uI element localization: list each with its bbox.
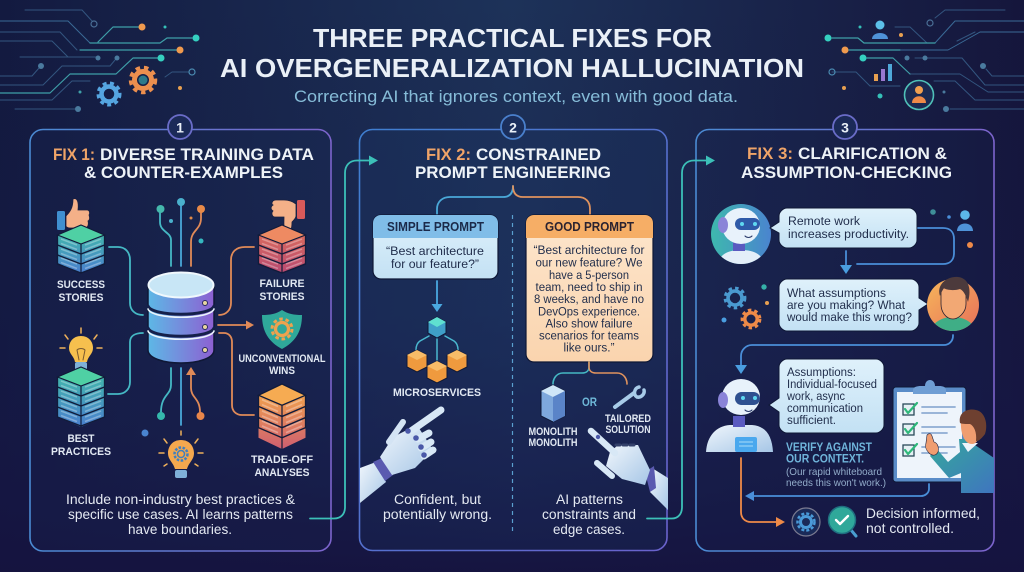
title: AI OVERGENERALIZATION HALLUCINATION bbox=[220, 53, 804, 83]
label: microservices: MICROSERVICES bbox=[393, 387, 481, 399]
text: simple prompt outcome bbox=[383, 492, 492, 522]
bubble: assumptions: Individual-focused bbox=[787, 377, 877, 391]
icon: unconventional wins shield bbox=[262, 310, 302, 349]
badge 1: 1 bbox=[176, 120, 184, 136]
icon: wrench bbox=[615, 387, 644, 407]
label: monolith: MONOLITH bbox=[528, 426, 578, 438]
text: fix 1 summary: have boundaries. bbox=[128, 522, 232, 537]
badge 1 bbox=[168, 115, 192, 139]
badge 3 bbox=[833, 115, 857, 139]
bubble: clarifying question bbox=[779, 279, 928, 331]
bubble: clarifying question: are you making? What bbox=[787, 298, 906, 312]
bubble: remote work claim bbox=[770, 208, 917, 248]
label: monolith bbox=[528, 426, 578, 449]
label: failure stories bbox=[260, 278, 304, 303]
title: THREE PRACTICAL FIXES FOR bbox=[313, 23, 712, 53]
label: tailored solution bbox=[605, 413, 651, 436]
heading: fix 2: FIX 2: bbox=[426, 145, 471, 164]
figure: person checking list bbox=[925, 410, 994, 493]
panel: fix 2 bbox=[360, 115, 668, 550]
bubble: assumptions: Assumptions: bbox=[787, 365, 856, 379]
heading: fix 3: FIX 3: bbox=[747, 144, 793, 163]
heading: fix 3: CLARIFICATION & bbox=[798, 144, 947, 163]
avatar: person bbox=[927, 277, 979, 331]
text: fix 1 summary: specific use cases. AI learns patterns bbox=[68, 507, 293, 522]
icon: light bulb bbox=[60, 328, 102, 371]
text: decision informed: not controlled. bbox=[866, 520, 954, 536]
label: tailored solution: SOLUTION bbox=[606, 424, 651, 436]
badge 3: 3 bbox=[841, 120, 849, 136]
label: best practices bbox=[51, 433, 111, 458]
bubble: remote work claim: Remote work bbox=[788, 214, 861, 228]
icon: robot hand right bbox=[591, 431, 668, 510]
card: good prompt: Also show failure bbox=[546, 316, 633, 330]
card: good prompt: 8 weeks, and have no bbox=[534, 292, 644, 306]
card: good prompt: our new feature? We bbox=[536, 256, 643, 270]
label: trade-off analyses bbox=[251, 454, 313, 479]
panel: fix 3 bbox=[696, 115, 994, 551]
icon: orange user badge bbox=[904, 80, 934, 110]
heading: fix 1: FIX 1: bbox=[53, 145, 95, 164]
icon: magnifier check bbox=[828, 506, 856, 536]
card: simple prompt bbox=[373, 215, 498, 279]
label: trade-off analyses: TRADE-OFF bbox=[251, 454, 313, 466]
label: or: OR bbox=[582, 397, 598, 409]
bubble: assumptions: sufficient. bbox=[787, 413, 836, 427]
label: failure stories: STORIES bbox=[260, 291, 304, 303]
badge 2: 2 bbox=[509, 120, 517, 136]
panel: fix 1 bbox=[30, 115, 331, 551]
label: unconventional wins bbox=[238, 353, 326, 377]
arrow: simple prompt to microservices bbox=[432, 281, 442, 312]
heading: fix 1: & COUNTER-EXAMPLES bbox=[84, 163, 283, 182]
heading: fix 1 bbox=[53, 145, 314, 182]
label: monolith: MONOLITH bbox=[528, 437, 578, 449]
icon: user and dots bbox=[930, 209, 973, 248]
icon: orange gear bbox=[130, 68, 156, 92]
text: decision informed bbox=[866, 505, 980, 536]
heading: fix 2 bbox=[415, 145, 611, 182]
text: fix 1 summary bbox=[66, 492, 295, 537]
heading: fix 1: DIVERSE TRAINING DATA bbox=[100, 145, 314, 164]
text: verify against context: VERIFY AGAINST bbox=[786, 442, 872, 454]
card: good prompt: GOOD PROMPT bbox=[545, 220, 634, 234]
label: best practices: PRACTICES bbox=[51, 446, 111, 458]
text: verify against context bbox=[786, 442, 886, 489]
icon: gears bbox=[722, 284, 769, 328]
icon: decision gear bbox=[792, 508, 820, 536]
heading: fix 2: CONSTRAINED bbox=[476, 145, 601, 164]
text: verify against context: needs this won't work.) bbox=[786, 477, 886, 489]
text: simple prompt outcome: potentially wrong. bbox=[383, 507, 492, 522]
connector: to assumptions bbox=[735, 335, 953, 374]
stack: failure stories bbox=[258, 225, 306, 273]
stack: trade-off analyses bbox=[258, 384, 306, 449]
label: tailored solution: TAILORED bbox=[605, 413, 651, 425]
card: good prompt bbox=[526, 215, 653, 362]
text: verify against context: OUR CONTEXT. bbox=[786, 454, 864, 466]
card: good prompt: DevOps experience. bbox=[538, 304, 640, 318]
heading: fix 3: ASSUMPTION-CHECKING bbox=[741, 163, 952, 182]
text: good prompt outcome: AI patterns bbox=[556, 492, 623, 507]
bubble: remote work claim: increases productivity. bbox=[788, 227, 909, 241]
card: good prompt: team, need to ship in bbox=[536, 280, 643, 294]
right circuit decoration bbox=[824, 10, 1024, 112]
divider bbox=[512, 215, 514, 535]
bubble: assumptions bbox=[769, 359, 884, 433]
icon: microservices tree bbox=[407, 317, 467, 383]
icon: blue gear bbox=[98, 83, 120, 105]
text: good prompt outcome: edge cases. bbox=[553, 522, 625, 537]
connector: bubble loop bbox=[840, 228, 954, 274]
bubble: assumptions: communication bbox=[787, 401, 863, 415]
card: good prompt: have a 5-person bbox=[549, 268, 629, 282]
bubble: clarifying question: What assumptions bbox=[787, 286, 886, 300]
stack: best practices bbox=[58, 367, 104, 427]
card: good prompt: “Best architecture for bbox=[534, 243, 644, 257]
bubble: clarifying question: would make this wrong? bbox=[786, 310, 912, 324]
card: simple prompt: for our feature?” bbox=[391, 257, 479, 271]
heading: fix 2: PROMPT ENGINEERING bbox=[415, 163, 611, 182]
text: decision informed: Decision informed, bbox=[866, 505, 980, 521]
icon: monolith server bbox=[541, 385, 565, 422]
icon: central database bbox=[148, 272, 214, 363]
label: success stories bbox=[57, 279, 105, 304]
label: unconventional wins: UNCONVENTIONAL bbox=[238, 353, 326, 365]
title bbox=[220, 23, 804, 83]
card: good prompt: like ours.” bbox=[564, 340, 614, 354]
stack: success stories bbox=[58, 225, 104, 273]
robot: full figure bbox=[706, 379, 773, 452]
label: failure stories: FAILURE bbox=[260, 278, 304, 290]
branch connector: good prompt outcomes bbox=[553, 362, 627, 384]
label: trade-off analyses: ANALYSES bbox=[254, 467, 310, 479]
icon: thumbs down bbox=[271, 200, 305, 233]
icon: mini bar chart bbox=[874, 64, 892, 81]
left circuit decoration bbox=[0, 10, 200, 112]
label: unconventional wins: WINS bbox=[269, 365, 295, 377]
connector: back to robot bbox=[745, 484, 929, 501]
icon: gear light bulb bbox=[159, 431, 203, 478]
badge 2 bbox=[501, 115, 525, 139]
connectors around database bbox=[108, 198, 254, 436]
card: simple prompt: “Best architecture bbox=[386, 244, 484, 258]
subtitle: Correcting AI that ignores context, even with good data. bbox=[294, 87, 738, 106]
card: simple prompt: SIMPLE PROMPT bbox=[387, 220, 484, 234]
text: good prompt outcome bbox=[542, 492, 636, 537]
arrow: fix 2 to fix 3 bbox=[647, 156, 715, 518]
icon: robot hand left bbox=[360, 410, 441, 503]
label: success stories: STORIES bbox=[58, 292, 104, 304]
label: success stories: SUCCESS bbox=[57, 279, 105, 291]
avatar: robot bbox=[711, 204, 771, 264]
bracket connector bbox=[437, 186, 590, 214]
card: good prompt: scenarios for teams bbox=[539, 328, 639, 342]
bubble: assumptions: work, async bbox=[786, 389, 845, 403]
icon: thumbs up bbox=[57, 199, 90, 230]
text: good prompt outcome: constraints and bbox=[542, 507, 636, 522]
text: simple prompt outcome: Confident, but bbox=[394, 492, 481, 507]
heading: fix 3 bbox=[741, 144, 952, 182]
arrow: fix 1 to fix 2 bbox=[310, 156, 378, 518]
icon: blue user bbox=[872, 20, 888, 39]
text: fix 1 summary: Include non-industry best practices & bbox=[66, 492, 295, 507]
connector: robot to decision bbox=[741, 458, 785, 527]
icon: clipboard checklist bbox=[893, 380, 966, 482]
label: best practices: BEST bbox=[68, 433, 95, 445]
text: verify against context: (Our rapid whiteboard bbox=[786, 466, 882, 478]
